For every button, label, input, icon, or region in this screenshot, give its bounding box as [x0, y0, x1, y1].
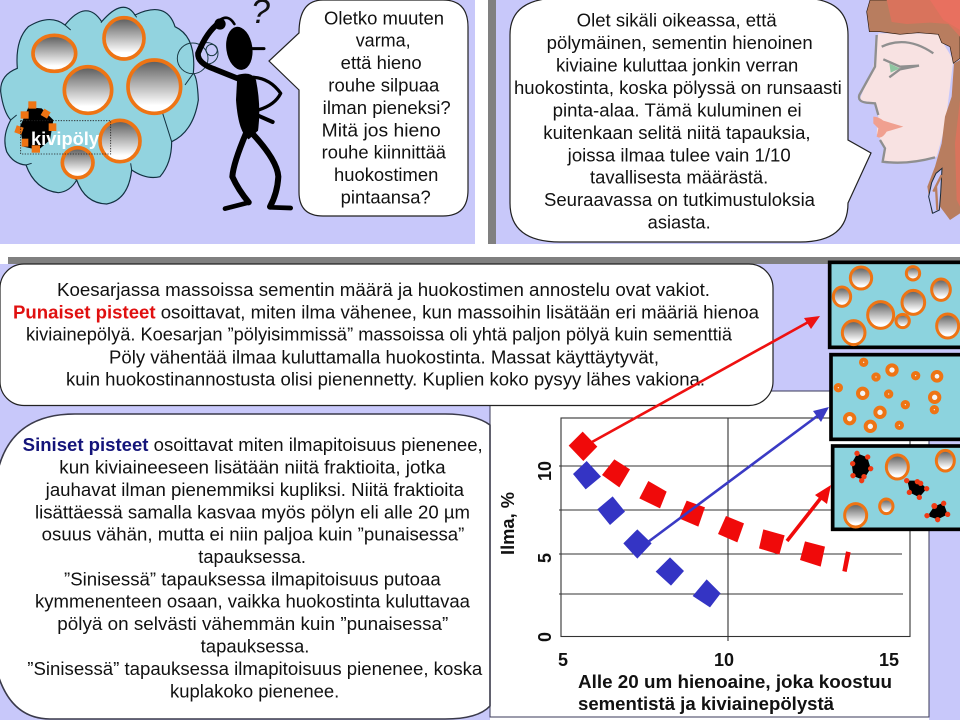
x tick labels: 10 [714, 650, 734, 670]
text panel: blue series explanation [0, 414, 490, 719]
arrow: red short [787, 485, 831, 541]
text panel: red series explanation: kiviainepölyä. Koesarjan ”pölyisimmissä” massoissa oli yhtä paljon pölyä kuin sementtiä [26, 324, 733, 344]
text panel: red series explanation: kuin huokostinannostusta olisi pienennetty. Kuplien koko pysyy lähes vakiona. [66, 370, 705, 390]
speech bubble: answer: joissa ilmaa tulee vain 1/10 [567, 145, 791, 165]
speech bubble: answer: Olet sikäli oikeassa, että [577, 11, 778, 31]
arrow: blue [648, 407, 829, 542]
y tick labels: 10 [535, 461, 555, 481]
speech bubble: answer: kiviaine kuluttaa jonkin verran [556, 56, 798, 76]
speech bubble: answer: pinta-alaa. Tämä kuluminen ei [553, 100, 802, 120]
axis label: x: sementistä ja kiviainepölystä [578, 694, 835, 714]
data: red series [569, 432, 851, 572]
x tick labels [558, 650, 899, 670]
axis label: x: Alle 20 um hienoaine, joka koostuu [578, 672, 892, 692]
arrow: red long [592, 316, 820, 442]
speech bubble: question: varma, [356, 31, 411, 51]
thumbnail: bubbles and dust [833, 446, 960, 529]
panel: chart [490, 391, 929, 717]
speech bubble: question: Mitä jos hieno [322, 120, 441, 140]
x tick labels: 15 [879, 650, 899, 670]
y tick labels: 0 [535, 632, 555, 642]
speech bubble: answer: huokostinta, koska pölyssä on runsaasti [514, 78, 842, 98]
speech bubble: question: Oletko muuten [324, 8, 444, 28]
y tick labels [535, 461, 555, 642]
speech bubble: answer: asiasta. [648, 212, 711, 232]
text panel: red series explanation: Pöly vähentää ilmaa kuluttamalla huokostinta. Massat käyttäytyvät, [109, 348, 659, 368]
text panel: blue series explanation: osuus vähän, mutta ei niin paljoa kuin ”punaisessa” [42, 525, 464, 545]
panel: top left scene [0, 0, 475, 244]
speech bubble: question: ilman pieneksi? [323, 98, 451, 118]
text panel: blue series explanation: tapauksessa. [198, 547, 306, 567]
panel: lower background [0, 257, 960, 720]
speech bubble: question: että hieno [341, 53, 422, 73]
text panel: blue series explanation: kuplakoko pienenee. [170, 682, 339, 702]
text panel: blue series explanation: tapauksessa. [201, 637, 309, 657]
axis label: y: Ilma, % [498, 492, 518, 555]
axis label: x [578, 672, 892, 714]
speech bubble: question: huokostimen [334, 165, 438, 185]
speech bubble: answer: pölymäinen, sementin hienoinen [547, 33, 813, 53]
text panel: blue series explanation: jauhavat ilman pienemmiksi kupliksi. Niitä fraktioita [45, 480, 465, 500]
speech bubble: question: rouhe kiinnittää [322, 143, 447, 163]
text panel: blue series explanation: kymmenenteen osaan, vaikka huokostinta kuluttavaa [35, 592, 471, 612]
speech bubble: answer: kuitenkaan selitä niitä tapauksia, [543, 123, 811, 143]
text panel: blue series explanation: kun kiviaineeseen lisätään niitä fraktioita, jotka [59, 457, 447, 477]
text panel: red series explanation: Punaiset pisteet osoittavat, miten ilma vähenee, kun massoihin lisätään eri määriä hienoa [13, 302, 760, 322]
text panel: blue series explanation: ”Sinisessä” tapauksessa ilmapitoisuus pienenee, koska [27, 659, 483, 679]
panel: top right scene [488, 0, 960, 244]
x tick labels: 5 [558, 650, 568, 670]
label: kivipöly: kivipöly [31, 129, 99, 149]
speech bubble: question [269, 0, 468, 216]
y tick labels: 5 [535, 553, 555, 563]
thought cloud with bubbles [1, 7, 218, 204]
speech bubble: question: pintaansa? [341, 187, 431, 207]
text panel: blue series explanation: Siniset pisteet osoittavat miten ilmapitoisuus pienenee, [23, 435, 483, 455]
speech bubble: answer [510, 0, 871, 242]
text panel: red series explanation [0, 264, 773, 406]
text panel: blue series explanation: lisättäessä samalla kasvaa myös pölyn eli alle 20 µm [35, 502, 470, 522]
thumbnail: small bubbles [831, 355, 960, 439]
icon: woman's face [859, 0, 960, 220]
speech bubble: question: rouhe silpuaa [328, 75, 440, 95]
speech bubble: answer: Seuraavassa on tutkimustuloksia [544, 190, 816, 210]
text panel: blue series explanation: ”Sinisessä” tapauksessa ilmapitoisuus putoaa [64, 569, 442, 589]
thumbnail: large bubbles [830, 262, 960, 347]
text panel: red series explanation: Koesarjassa massoissa sementin määrä ja huokostimen annostelu ovat vakiot. [57, 280, 710, 300]
speech bubble: answer: tavallisesta määrästä. [590, 168, 768, 188]
plot frame and grid [559, 418, 910, 641]
icon: thinking stick figure [198, 18, 291, 209]
text panel: blue series explanation: pölyä on selvästi vähemmän kuin ”punaisessa” [57, 614, 448, 634]
data: blue series [573, 461, 721, 607]
